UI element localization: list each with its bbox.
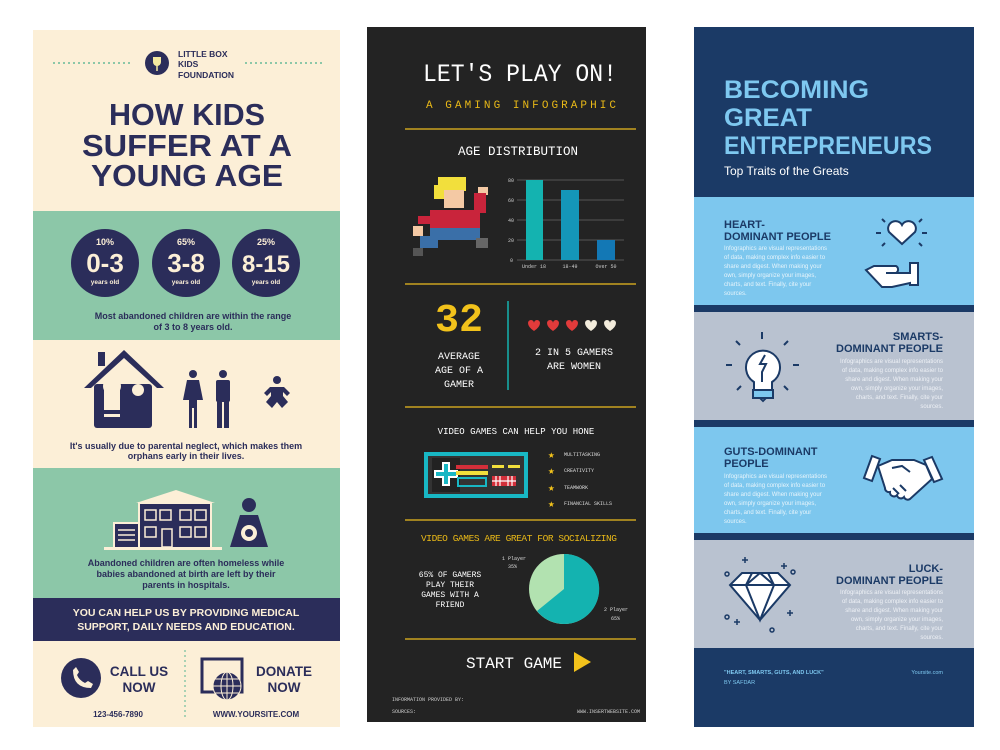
section: heart: DOMINANT PEOPLE	[724, 231, 831, 243]
text: 65%: PLAY THEIR	[426, 581, 474, 590]
call us	[61, 658, 168, 719]
section: heart: own, simply organize your images,	[724, 273, 816, 279]
logo header: FOUNDATION	[178, 70, 234, 80]
stat: women gamers: ARE WOMEN	[547, 362, 601, 373]
age band	[33, 211, 340, 340]
logo header: LITTLE BOX	[178, 49, 228, 59]
section: luck: LUCK-	[909, 563, 943, 575]
bar chart: Over 50	[595, 264, 617, 270]
section: guts: GUTS-DOMINANT	[724, 446, 818, 458]
circle 0-3: 0-3	[86, 248, 124, 278]
list: skills: ★	[548, 466, 555, 478]
list: skills: CREATIVITY	[564, 468, 594, 474]
pie chart: 65%	[611, 616, 620, 622]
circle 0-3: years old	[91, 279, 119, 286]
caption: babies abandoned at birth are left by their	[96, 569, 276, 579]
panel: gaming	[367, 27, 646, 722]
text: 65%: FRIEND	[436, 601, 465, 610]
section: smarts: of data, making complex info easier to	[842, 368, 944, 374]
stat: average age: AGE OF A	[435, 366, 483, 377]
bar chart: 0	[510, 258, 513, 264]
bar chart: 18-49	[562, 264, 578, 270]
logo header: KIDS	[178, 59, 199, 69]
icon: light bulb	[726, 332, 799, 401]
icons: house and family	[84, 350, 290, 428]
section: smarts: share and digest. When making your	[845, 377, 943, 383]
icon: heart in hand	[866, 219, 927, 287]
pie chart: 35%	[508, 564, 517, 570]
section: smarts: SMARTS-	[893, 331, 943, 343]
title: ENTREPRENEURS	[724, 132, 932, 160]
icon: pixel runner	[413, 177, 488, 256]
icon: building	[104, 490, 222, 550]
section: heart: of data, making complex info easier to	[724, 255, 826, 261]
call us: 123-456-7890	[93, 710, 143, 719]
bar chart	[508, 178, 624, 270]
bar chart: Under 18	[522, 264, 546, 270]
start game	[466, 652, 591, 673]
section: luck: own, simply organize your images,	[851, 617, 943, 623]
section: luck: share and digest. When making your	[845, 608, 943, 614]
circle 8-15: 25%	[257, 237, 275, 247]
icon: handshake	[864, 456, 942, 500]
call to action band: YOU CAN HELP US BY PROVIDING MEDICAL	[73, 607, 300, 619]
section: luck: Infographics are visual representations	[840, 590, 943, 596]
footer: WWW.INSERTWEBSITE.COM	[577, 709, 640, 715]
section: guts: sources.	[724, 519, 747, 525]
icon: diamond	[725, 557, 795, 632]
section: smarts	[694, 312, 974, 420]
icon: controller	[424, 452, 528, 498]
section: heart: sources.	[724, 291, 747, 297]
call us: CALL US	[110, 664, 168, 679]
bar chart: 80	[508, 178, 514, 184]
caption	[88, 558, 284, 590]
section: luck: DOMINANT PEOPLE	[836, 575, 943, 587]
section: guts: own, simply organize your images,	[724, 501, 816, 507]
stat: average age	[435, 299, 483, 391]
section: heart	[694, 197, 974, 305]
stat: average age: AVERAGE	[438, 352, 480, 363]
caption: of 3 to 8 years old.	[153, 322, 233, 332]
caption	[95, 311, 291, 332]
list: skills: ★	[548, 483, 555, 495]
heading: age distribution: AGE DISTRIBUTION	[458, 145, 578, 159]
text: 65%: 65% OF GAMERS	[419, 571, 481, 580]
logo header	[53, 49, 325, 80]
caption: parents in hospitals.	[142, 580, 230, 590]
icon: pregnant woman	[230, 498, 268, 547]
text: 65%: GAMES WITH A	[421, 591, 479, 600]
section: heart: charts, and text. Finally, cite your	[724, 282, 811, 288]
footer	[724, 670, 943, 686]
circle 0-3	[71, 229, 139, 297]
caption: Most abandoned children are within the range	[95, 311, 291, 321]
call us: NOW	[122, 680, 156, 695]
title	[82, 97, 292, 193]
section: guts: PEOPLE	[724, 458, 769, 470]
pie chart: 2 Player	[604, 607, 628, 613]
stat: average age: 32	[435, 299, 483, 344]
list: skills: FINANCIAL SKILLS	[564, 501, 612, 507]
call to action band	[33, 598, 340, 641]
donate: DONATE	[256, 664, 312, 679]
bar chart: 40	[508, 218, 514, 224]
section: smarts: own, simply organize your images,	[851, 386, 943, 392]
list: skills	[548, 450, 612, 511]
section: heart: share and digest. When making your	[724, 264, 822, 270]
start game: START GAME	[466, 655, 562, 673]
caption: parental neglect: It's usually due to parental neglect, which makes them	[70, 441, 302, 451]
circle 8-15	[232, 229, 300, 297]
donate	[202, 659, 312, 719]
stat: women gamers: 2 IN 5 GAMERS	[535, 348, 613, 359]
caption: parental neglect	[70, 441, 302, 461]
title	[724, 76, 932, 160]
section: guts: share and digest. When making your	[724, 492, 822, 498]
band: homeless	[33, 468, 340, 598]
section: luck: charts, and text. Finally, cite your	[856, 626, 943, 632]
circle 8-15: years old	[252, 279, 280, 286]
list: skills: MULTITASKING	[564, 452, 600, 458]
donate: NOW	[268, 680, 301, 695]
pie chart: 1 Player	[502, 556, 526, 562]
title: LET'S PLAY ON!	[423, 60, 617, 89]
list: skills: TEAMWORK	[564, 485, 588, 491]
section: smarts: charts, and text. Finally, cite your	[856, 395, 943, 401]
subtitle: A GAMING INFOGRAPHIC	[426, 100, 616, 112]
section: guts: of data, making complex info easier to	[724, 483, 826, 489]
section: smarts: Infographics are visual representations	[840, 359, 943, 365]
call to action band: SUPPORT, DAILY NEEDS AND EDUCATION.	[77, 621, 295, 633]
caption: Abandoned children are often homeless while	[88, 558, 284, 568]
footer: Yoursite.com	[911, 670, 943, 676]
heading: hone: VIDEO GAMES CAN HELP YOU HONE	[438, 427, 594, 437]
footer: BY SAFDAR	[724, 680, 755, 686]
list: skills: ★	[548, 499, 555, 511]
circle 3-8: years old	[172, 279, 200, 286]
stat: women gamers	[528, 320, 616, 373]
section: guts: charts, and text. Finally, cite your	[724, 510, 811, 516]
footer: SOURCES:	[392, 709, 416, 715]
section: luck	[694, 540, 974, 648]
title: SUFFER AT A	[82, 128, 292, 163]
footer: "HEART, SMARTS, GUTS, AND LUCK"	[724, 670, 824, 676]
section: smarts: DOMINANT PEOPLE	[836, 343, 943, 355]
circle 8-15: 8-15	[242, 251, 290, 278]
heading: socializing: VIDEO GAMES ARE GREAT FOR SOCIALIZING	[421, 533, 617, 544]
stat: average age: GAMER	[444, 380, 474, 391]
bar chart: 60	[508, 198, 514, 204]
section: luck: of data, making complex info easier to	[842, 599, 944, 605]
donate: WWW.YOURSITE.COM	[213, 710, 299, 719]
title: HOW KIDS	[109, 97, 265, 132]
panel: kids foundation	[33, 30, 340, 727]
section: luck: sources.	[920, 635, 943, 641]
bar chart: 20	[508, 238, 514, 244]
section: heart: Infographics are visual representations	[724, 246, 827, 252]
section: guts	[694, 427, 974, 533]
subtitle: Top Traits of the Greats	[724, 164, 849, 178]
caption: parental neglect: orphans early in their lives.	[128, 451, 244, 461]
section: guts: Infographics are visual representations	[724, 474, 827, 480]
pie chart	[502, 554, 628, 624]
circle 3-8: 3-8	[167, 248, 205, 278]
section: smarts: sources.	[920, 404, 943, 410]
circle 0-3: 10%	[96, 237, 114, 247]
footer: INFORMATION PROVIDED BY:	[392, 697, 464, 703]
footer	[392, 697, 640, 715]
panel: entrepreneurs	[694, 27, 974, 727]
title: YOUNG AGE	[91, 158, 283, 193]
title: GREAT	[724, 104, 812, 132]
section: heart: HEART-	[724, 219, 765, 231]
title: BECOMING	[724, 76, 869, 104]
list: skills: ★	[548, 450, 555, 462]
circle 3-8: 65%	[177, 237, 195, 247]
circle 3-8	[152, 229, 220, 297]
text: 65%	[419, 571, 481, 610]
